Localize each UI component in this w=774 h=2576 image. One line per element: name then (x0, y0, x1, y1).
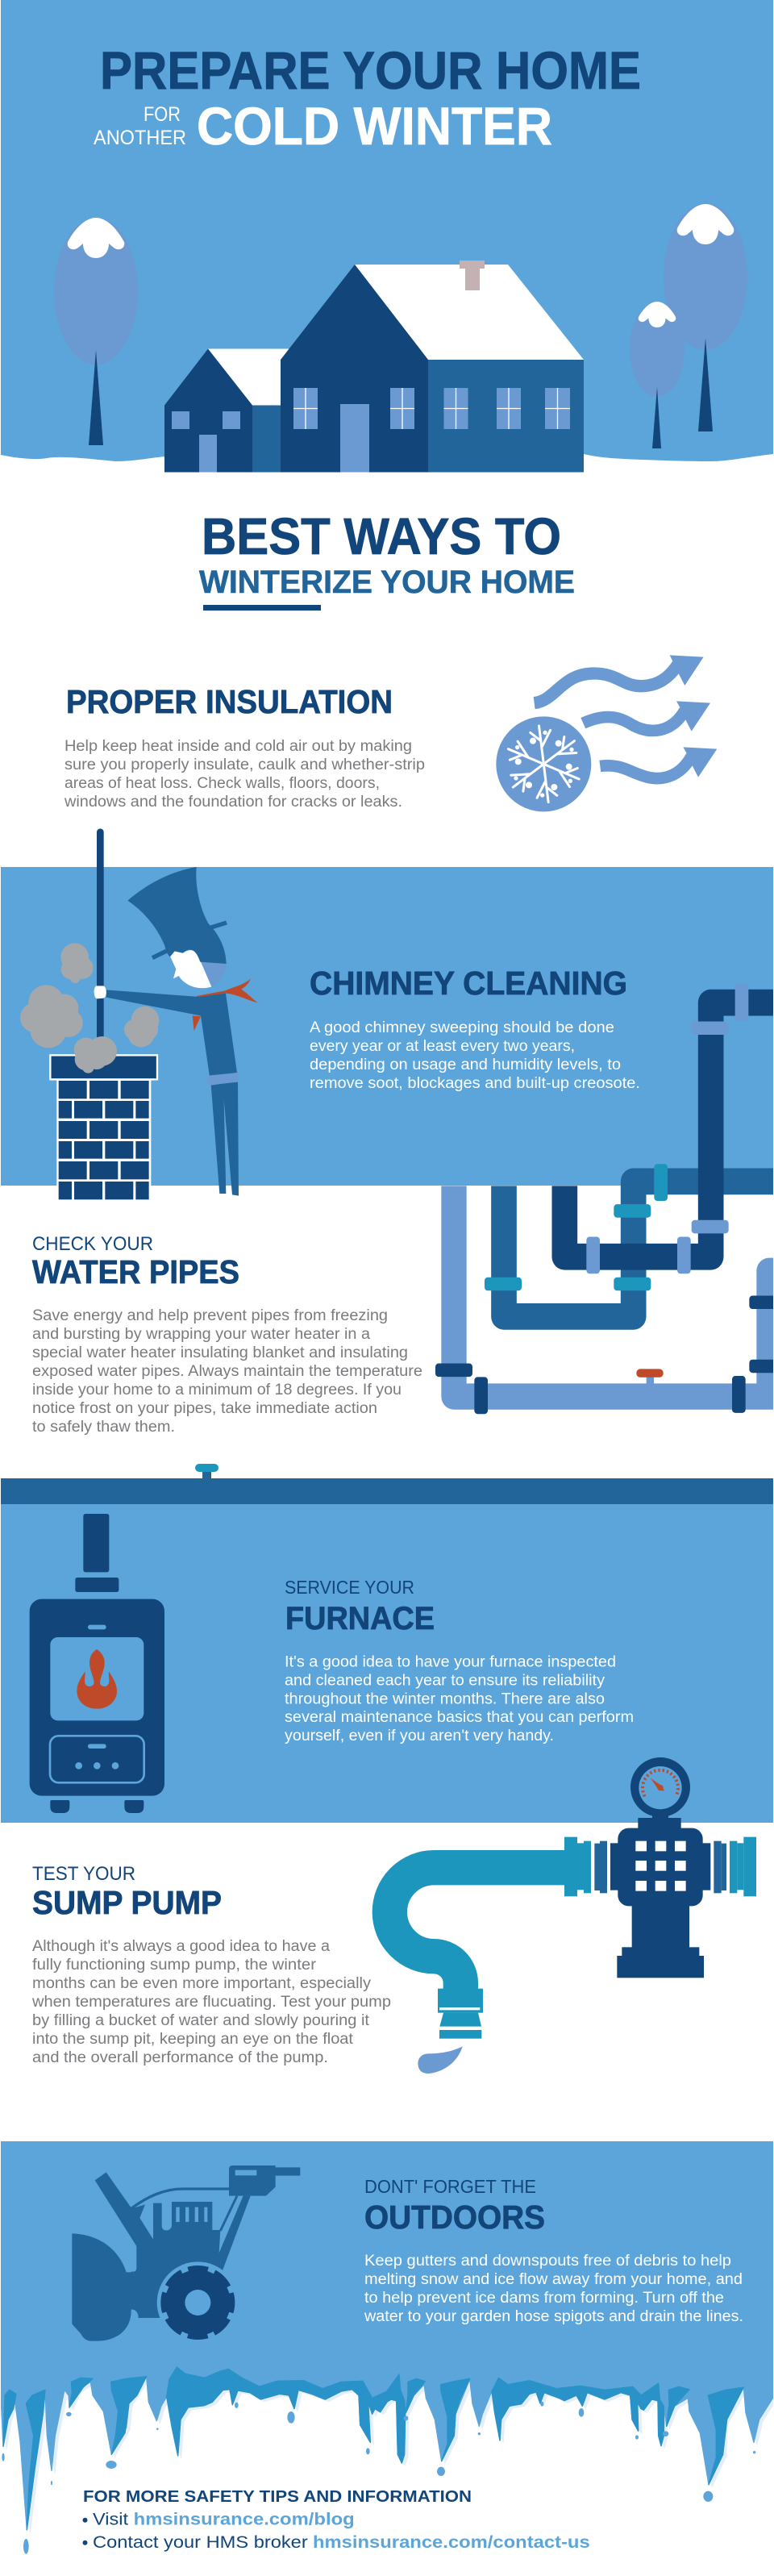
outdoors body (364, 2253, 743, 2325)
handle rail (131, 2189, 231, 2208)
furnace body (30, 1599, 164, 1796)
icon: furnace (30, 1514, 164, 1813)
pump body (610, 1813, 710, 1978)
pressure gauge (630, 1757, 690, 1817)
discharge pipe (389, 1868, 567, 1992)
icon: right tall snowy tree (664, 203, 747, 431)
smoke over chimney (74, 1036, 117, 1073)
water drips (2, 2403, 370, 2554)
furnace body: yourself, even if you aren't very handy. (285, 1728, 554, 1744)
pipe: light blue right riser (769, 1271, 774, 1397)
chimney body: remove soot, blockages and built-up creosote. (310, 1075, 640, 1092)
icicles right half (387, 2355, 774, 2502)
heading line 2: WINTERIZE YOUR HOME (199, 565, 575, 600)
panel: header background with snow line (1, 0, 773, 461)
handle strut (220, 2196, 237, 2231)
outdoors body: to help prevent ice dams from forming. Turn off the (364, 2290, 724, 2307)
arrow 1 (535, 655, 704, 703)
outdoors kicker: DONT' FORGET THE (364, 2176, 536, 2197)
arrow 2 (583, 701, 710, 732)
pipe clamps: teal (485, 1164, 668, 1290)
water pipes kicker: CHECK YOUR (32, 1233, 153, 1255)
control box (229, 2165, 300, 2196)
illustration: chimney sweep (20, 828, 257, 1200)
red valve (636, 1369, 664, 1384)
water pipes body: inside your home to a minimum of 18 degrees. If you (32, 1382, 402, 1398)
section: proper insulation text (64, 683, 425, 811)
outdoors body: Keep gutters and downspouts free of debris to help (364, 2253, 731, 2270)
water drips (403, 2402, 755, 2502)
title small word: another: ANOTHER (94, 127, 186, 149)
pipe: dark blue (564, 1002, 773, 1257)
water pipes body: to safely thaw them. (32, 1419, 175, 1436)
illustration: sump pump (389, 1757, 756, 2074)
flue (83, 1514, 109, 1572)
furnace window (50, 1637, 144, 1720)
section: sump pump text (31, 1863, 391, 2066)
water pipes body: and bursting by wrapping your water heater in a (32, 1326, 370, 1343)
sump pump body (31, 1938, 391, 2066)
footer heading: FOR MORE SAFETY TIPS AND INFORMATION (83, 2488, 472, 2506)
teal flanges (564, 1837, 756, 1896)
panel: furnace band (1, 1504, 773, 1823)
mid flanges (594, 1841, 726, 1893)
feet (50, 1800, 144, 1813)
chimney body: every year or at least every two years, (310, 1038, 575, 1055)
icicles left half (2, 2355, 390, 2554)
heading line 1: BEST WAYS TO (202, 507, 561, 565)
section: chimney cleaning text (310, 965, 640, 1092)
insulation heading: PROPER INSULATION (66, 683, 393, 720)
auger housing (72, 2233, 137, 2341)
water pipes heading: WATER PIPES (32, 1253, 239, 1290)
icicle shadow (390, 2357, 774, 2486)
horizontal pipe with valve (1, 1464, 773, 1504)
footer line: blog link: hmsinsurance.com/blog (134, 2511, 355, 2529)
icicle silhouette (387, 2355, 773, 2485)
sweep figure (94, 867, 257, 1196)
flame (77, 1649, 117, 1709)
furnace body: throughout the winter months. There are also (285, 1690, 605, 1708)
pipe: mid blue (504, 1182, 773, 1316)
furnace kicker: SERVICE YOUR (285, 1577, 414, 1598)
water pipes body: exposed water pipes. Always maintain the temperature (32, 1363, 422, 1380)
section: furnace text (285, 1577, 634, 1744)
darker ice (387, 2374, 743, 2485)
pipe clamps: dark (435, 1295, 774, 1414)
smoke clouds (20, 943, 159, 1048)
flue collar (75, 1578, 119, 1592)
furnace body: and cleaned each year to ensure its reliability (285, 1673, 605, 1689)
sump pump body: into the sump pit, keeping an eye on the float (32, 2031, 354, 2048)
wheel clearance (157, 2261, 239, 2344)
arrow 3 (600, 747, 717, 778)
sump pump body: fully functioning sump pump, the winter (32, 1957, 317, 1974)
footer line: contact link: Contact your HMS broker (93, 2533, 308, 2552)
water drop (418, 2046, 463, 2074)
water pipes body: special water heater insulating blanket and insulating (32, 1344, 408, 1361)
pipe clamps: light (586, 984, 748, 1273)
section: outdoors text (364, 2176, 743, 2325)
heading underline (203, 605, 321, 611)
water pipes body: Save energy and help prevent pipes from freezing (32, 1307, 388, 1324)
furnace body: It's a good idea to have your furnace inspected (285, 1653, 616, 1671)
icicle shadow (4, 2357, 390, 2532)
icicle silhouette (2, 2355, 387, 2530)
chimney body: A good chimney sweeping should be done (310, 1019, 614, 1036)
snowflake (496, 716, 591, 811)
water pipes body (32, 1307, 422, 1436)
panel: outdoors band (1, 2141, 773, 2359)
furnace body: several maintenance basics that you can perform (285, 1709, 634, 1726)
sump pump heading: SUMP PUMP (32, 1884, 222, 1921)
top handle (88, 1625, 106, 1629)
engine vents (176, 2207, 207, 2222)
icon: left snowy tree (54, 218, 138, 445)
pump grill (635, 1841, 686, 1891)
sump pump body: Although it's always a good idea to have a (32, 1938, 330, 1955)
sump pump body: when temperatures are flucuating. Test your pump (31, 1994, 391, 2011)
insulation body (64, 738, 425, 811)
blower body (95, 2172, 251, 2318)
insulation body: sure you properly insulate, caulk and whether-strip (64, 757, 425, 773)
sump pump kicker: TEST YOUR (32, 1863, 135, 1885)
title (94, 40, 641, 156)
chimney heading: CHIMNEY CLEANING (310, 965, 627, 1002)
sump pump body: months can be even more important, especially (32, 1975, 372, 1992)
footer: more information (82, 2488, 590, 2552)
chimney body (310, 1019, 640, 1092)
sump pump body: and the overall performance of the pump. (32, 2049, 328, 2066)
house illustration (164, 261, 584, 473)
nozzle (438, 1989, 483, 2039)
section: water pipes text (32, 1233, 422, 1436)
illustration: water pipes (435, 984, 774, 1414)
footer line: blog link: Visit (93, 2511, 128, 2529)
footer line: contact link: hmsinsurance.com/contact-us (313, 2533, 590, 2552)
sump pump body: by filling a bucket of water and slowly pouring it (32, 2012, 370, 2029)
insulation body: windows and the foundation for cracks or leaks. (64, 794, 402, 811)
insulation body: Help keep heat inside and cold air out by making (64, 738, 412, 755)
chimney body: depending on usage and humidity levels, to (310, 1057, 621, 1073)
pipe: light blue (454, 1186, 773, 1397)
broom pole (97, 828, 104, 1044)
title small word: for: FOR (144, 103, 181, 126)
tyre (164, 2268, 232, 2337)
furnace body (285, 1653, 634, 1744)
icon: snow blower (72, 2165, 300, 2344)
chimney stack (50, 1055, 157, 1200)
darker ice (3, 2367, 387, 2530)
insulation body: areas of heat loss. Check walls, floors, doors, (64, 775, 380, 792)
outdoors body: melting snow and ice flow away from your home, and (364, 2271, 743, 2288)
water pipes body: notice frost on your pipes, take immediate action (32, 1400, 377, 1417)
panel: chimney cleaning band (1, 867, 773, 1186)
icon: right small snowy tree (630, 302, 685, 448)
title line 1: PREPARE YOUR HOME (100, 40, 641, 100)
title line 2: COLD WINTER (197, 96, 552, 156)
heading: best ways to winterize your home (199, 507, 575, 611)
icon: snowflake with wind arrows (496, 655, 717, 811)
outdoors body: water to your garden hose spigots and drain the lines. (364, 2308, 743, 2325)
outdoors heading: OUTDOORS (364, 2199, 545, 2236)
furnace heading: FURNACE (285, 1601, 435, 1636)
footer line: contact link (82, 2533, 590, 2552)
control panel (50, 1736, 144, 1782)
